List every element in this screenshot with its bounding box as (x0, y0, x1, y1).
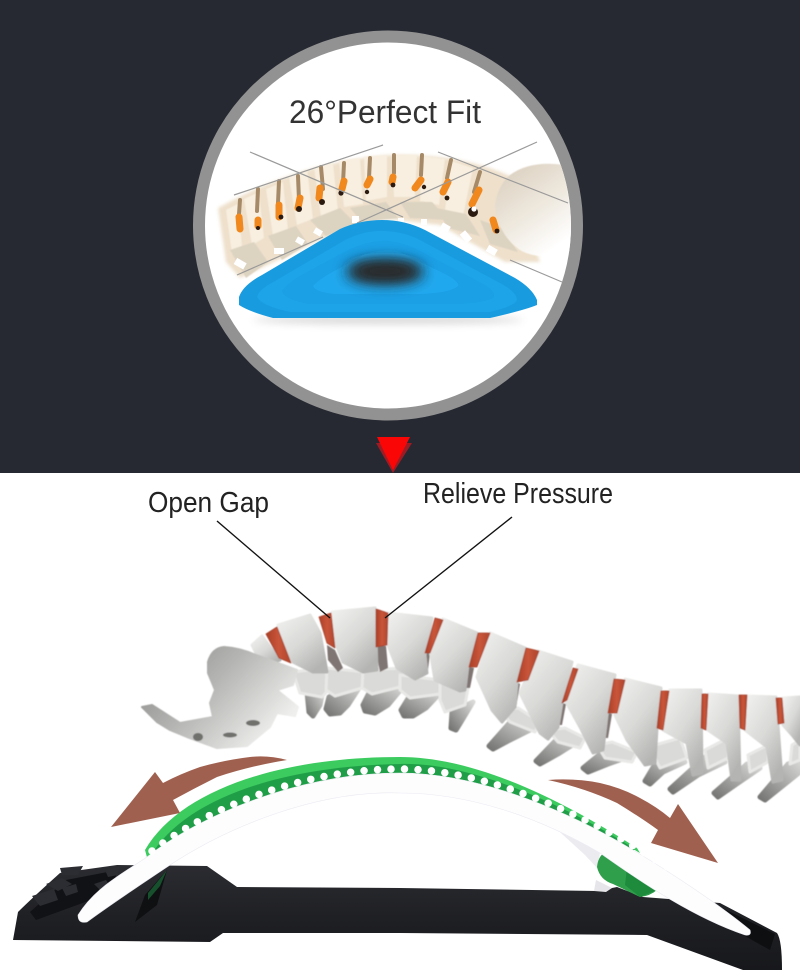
small white foot (594, 880, 612, 892)
angle guide lines (234, 142, 568, 282)
green roller (597, 853, 657, 897)
pelvis (142, 647, 298, 748)
base studs (32, 866, 120, 906)
panel: 26 degree perfect fit circle (199, 36, 577, 414)
lower spine illustration (142, 608, 800, 800)
circle title: 26°Perfect Fit (289, 94, 481, 130)
label: relieve pressure: Relieve Pressure (423, 478, 613, 510)
green arch (145, 757, 640, 861)
blue wedge (239, 220, 537, 318)
laminae (293, 668, 800, 772)
label: open gap: Open Gap (148, 487, 269, 519)
dark header background (0, 0, 800, 473)
back support under-leg (550, 823, 600, 868)
arch teeth (152, 769, 672, 870)
pedicles (327, 645, 612, 738)
black base (13, 865, 782, 970)
left slot shadow (135, 870, 167, 922)
spinous processes (307, 685, 800, 800)
intervertebral discs (266, 609, 784, 730)
arrow: left brown (111, 756, 287, 827)
white arch (78, 769, 750, 935)
spine illustration in circle (218, 142, 575, 282)
icon: red down arrow (376, 437, 412, 473)
leader line: relieve pressure (385, 517, 512, 618)
blue wedge shadow (253, 316, 523, 324)
leader line: open gap (217, 521, 330, 618)
arrow: right brown (548, 779, 718, 863)
white lower background (0, 473, 800, 977)
sacral foramina (193, 720, 260, 741)
base left recess (30, 870, 118, 920)
pelvis bone (495, 164, 575, 256)
base right slot (716, 905, 775, 950)
vertebra bodies (252, 608, 800, 782)
